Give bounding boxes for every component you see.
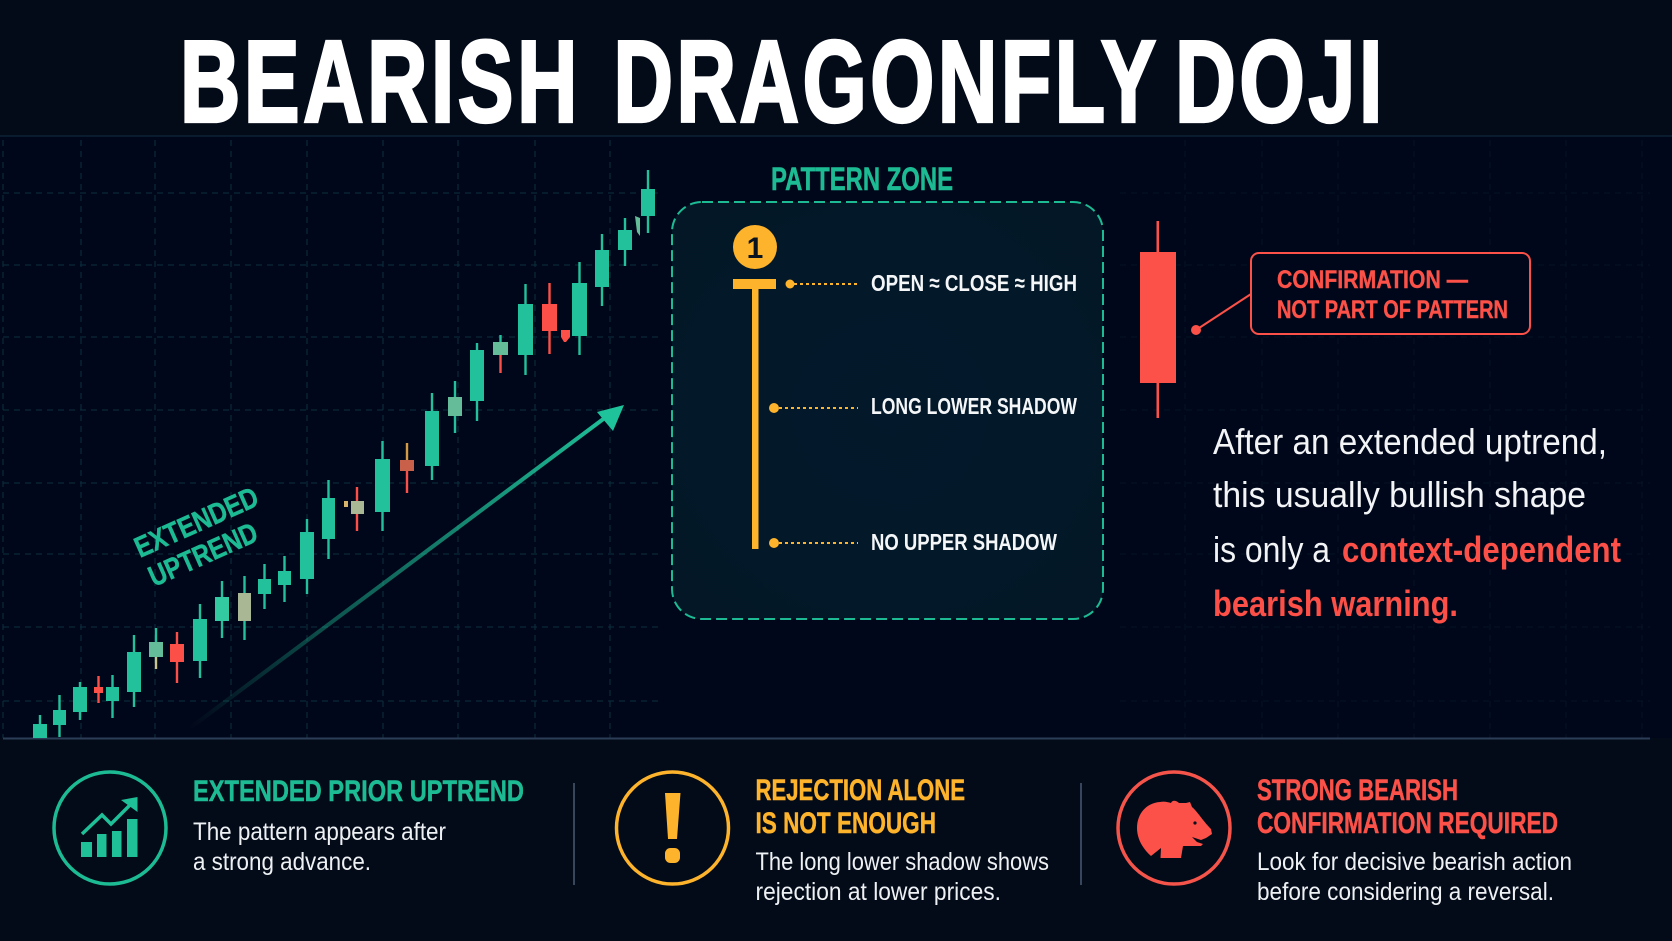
description [193, 818, 446, 876]
description [1257, 848, 1572, 906]
heading [1257, 774, 1558, 840]
icon: rising chart [54, 772, 166, 884]
text block: context explanation: bearish warning. [1213, 583, 1458, 624]
label: extended uptrend: EXTENDED [130, 481, 263, 564]
panel: pattern zone [672, 202, 1103, 619]
heading: pattern zone: PATTERN ZONE [771, 161, 953, 197]
callout: open close high [786, 270, 1077, 296]
description [756, 848, 1049, 906]
panel: extended prior uptrend [54, 772, 524, 884]
callout: no upper shadow: NO UPPER SHADOW [871, 529, 1058, 555]
text block: context explanation: After an extended uptrend, [1213, 421, 1607, 462]
badge: number 1: 1 [747, 232, 763, 265]
heading: STRONG BEARISH [1257, 774, 1458, 807]
description: before considering a reversal. [1257, 878, 1554, 906]
description: a strong advance. [193, 848, 371, 876]
callout: confirmation not part of pattern: CONFIRMATION — [1277, 266, 1468, 294]
icon: bear [1118, 772, 1230, 884]
callout: long lower shadow [769, 393, 1078, 419]
text block: context explanation: this usually bullish shape [1213, 474, 1586, 515]
candlestick chart: extended uptrend [33, 170, 655, 738]
title: DOJI [1175, 16, 1386, 146]
callout: confirmation not part of pattern [1191, 253, 1530, 335]
text block: context explanation [1213, 421, 1621, 624]
panel: strong bearish confirmation [1118, 772, 1572, 906]
heading: EXTENDED PRIOR UPTREND [193, 775, 524, 808]
description: The long lower shadow shows [756, 848, 1049, 876]
panel: rejection alone [616, 772, 1049, 906]
label: extended uptrend: UPTREND [144, 517, 263, 593]
heading: REJECTION ALONE [756, 774, 965, 807]
badge: number 1 [733, 225, 777, 269]
description: Look for decisive bearish action [1257, 848, 1572, 876]
heading [756, 774, 965, 840]
title: BEARISH [180, 16, 581, 146]
title [180, 16, 1386, 146]
heading: CONFIRMATION REQUIRED [1257, 807, 1558, 840]
label: extended uptrend [130, 481, 263, 593]
text block: context explanation: context-dependent [1342, 529, 1621, 570]
description: The pattern appears after [193, 818, 446, 846]
uptrend arrow [190, 405, 624, 728]
title: DRAGONFLY [614, 16, 1160, 146]
icon: warning exclamation [616, 772, 728, 884]
callout: open close high: OPEN ≈ CLOSE ≈ HIGH [871, 270, 1077, 296]
callout: no upper shadow [769, 529, 1058, 555]
description: rejection at lower prices. [756, 878, 1001, 906]
text block: context explanation: is only a [1213, 529, 1331, 570]
dragonfly doji candle [733, 279, 776, 549]
heading: IS NOT ENOUGH [756, 807, 936, 840]
callout: long lower shadow: LONG LOWER SHADOW [871, 393, 1078, 419]
callout: confirmation not part of pattern: NOT PART OF PATTERN [1277, 296, 1508, 324]
confirmation red candle [1140, 221, 1176, 418]
